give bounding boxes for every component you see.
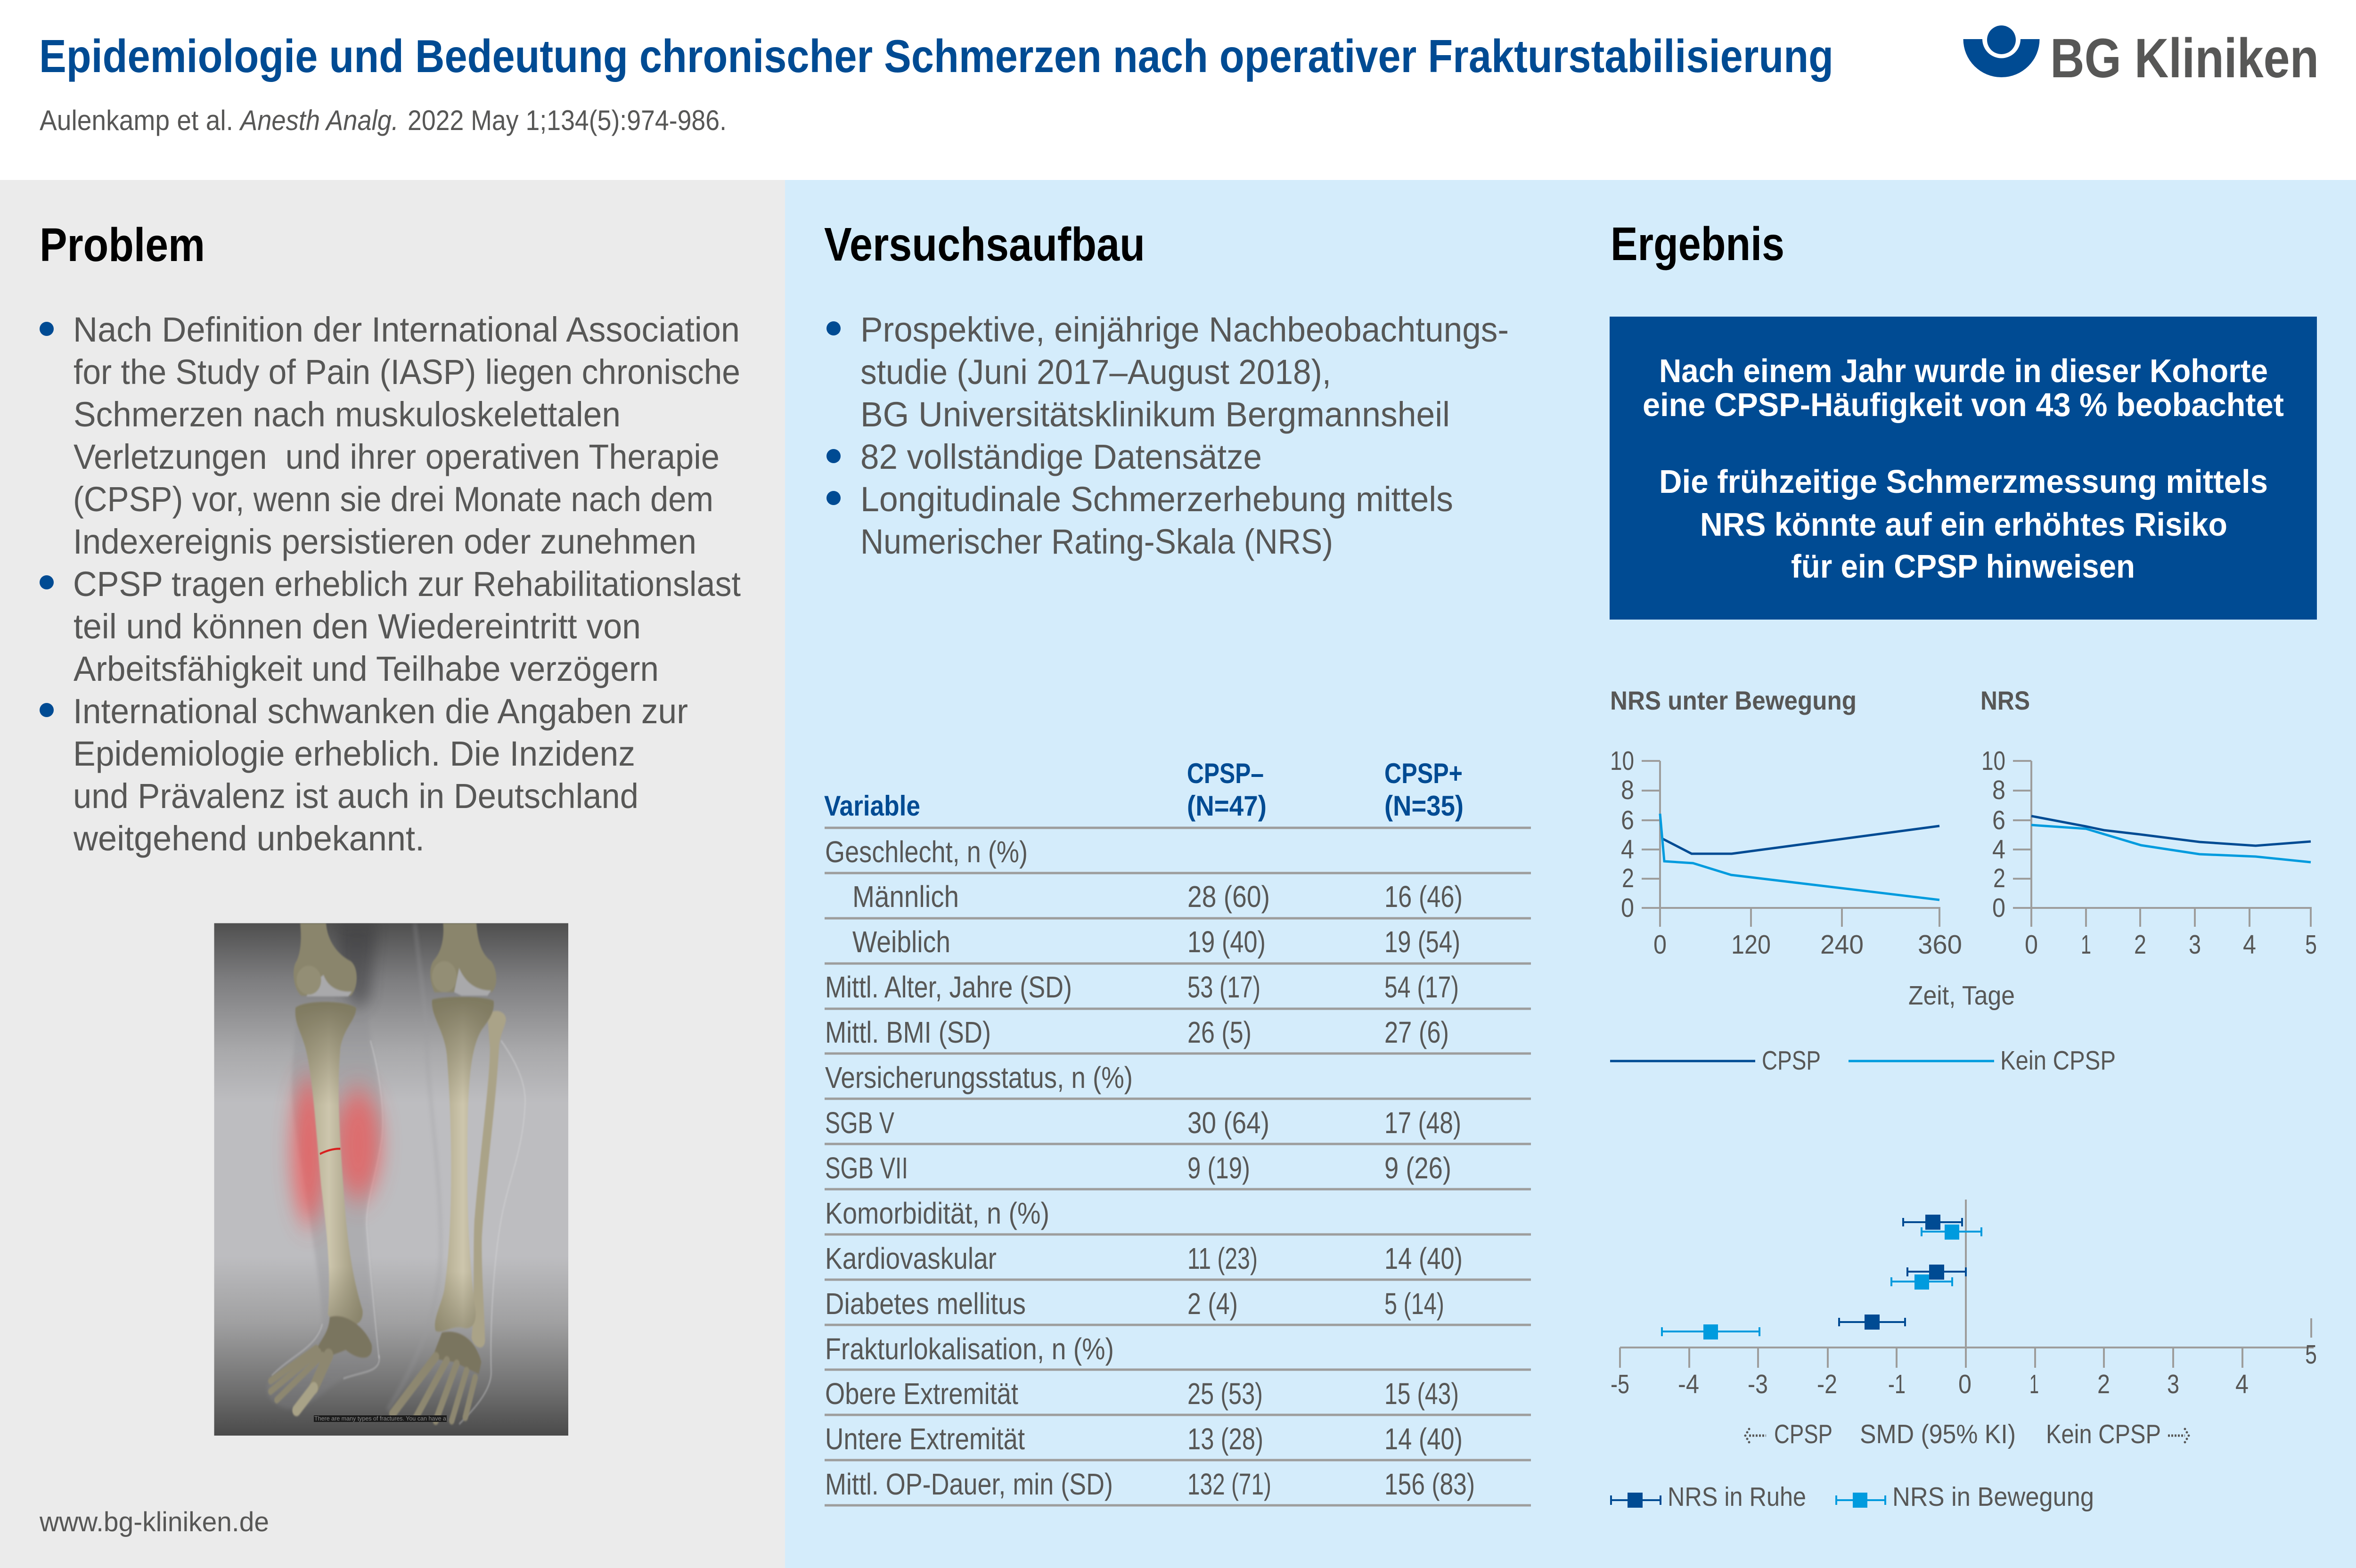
forest plot: SMD: -5	[1611, 1369, 1629, 1399]
line chart: NRS: 0	[1992, 893, 2005, 923]
table rows: 9 (26)	[1384, 1151, 1451, 1185]
series: CPSP	[2031, 816, 2311, 846]
forest plot: SMD: 3	[2167, 1369, 2179, 1399]
callout: key result: Nach einem Jahr wurde in dieser Kohorte	[1659, 352, 2268, 389]
text block: Versuchsaufbau bullets	[826, 310, 1509, 561]
text block: Versuchsaufbau bullets: Prospektive, einjährige Nachbeobachtungs-	[860, 310, 1509, 349]
forest plot: SMD: 1	[2029, 1369, 2039, 1399]
title: Epidemiologie und Bedeutung chronischer Schmerzen nach operativer Frakturstabilisierung	[39, 30, 1833, 82]
line chart: NRS unter Bewegung: 6	[1621, 805, 1634, 835]
text block: Versuchsaufbau bullets: studie (Juni 2017–August 2018),	[860, 352, 1331, 392]
text block: Problem bullets: CPSP tragen erheblich zur Rehabilitationslast	[73, 564, 741, 604]
forest plot: SMD: -3	[1748, 1369, 1768, 1399]
heading: Versuchsaufbau: Versuchsaufbau	[824, 218, 1145, 271]
line chart: NRS unter Bewegung: 0	[1621, 893, 1634, 923]
markers: NRS in Ruhe	[1839, 1215, 1966, 1330]
text block: Versuchsaufbau bullets: Numerischer Rating-Skala (NRS)	[860, 522, 1333, 561]
line chart: NRS: 10	[1981, 746, 2005, 776]
callout: key result: für ein CPSP hinweisen	[1791, 548, 2135, 585]
forest plot: SMD: 4	[2235, 1369, 2249, 1399]
table header: (N=47)	[1187, 790, 1267, 822]
text block: Problem bullets: teil und können den Wiedereintritt von	[74, 607, 641, 646]
line chart: NRS unter Bewegung: 8	[1621, 775, 1634, 805]
table rows	[825, 835, 1475, 1501]
forest plot axis caption: Kein CPSP	[2046, 1419, 2161, 1449]
text block: Problem bullets	[40, 310, 741, 858]
text block: Problem bullets: Epidemiologie erheblich. Die Inzidenz	[73, 734, 635, 773]
table rows: 28 (60)	[1187, 880, 1270, 914]
line chart: NRS unter Bewegung: 10	[1610, 746, 1634, 776]
forest plot axis caption: SMD (95% KI)	[1860, 1419, 2016, 1449]
table rows: Kardiovaskular	[825, 1241, 997, 1275]
heading: Ergebnis: Ergebnis	[1611, 218, 1784, 270]
line chart: NRS: 0	[2025, 930, 2038, 960]
table rows: 14 (40)	[1384, 1422, 1463, 1456]
line chart: NRS: 2	[2134, 930, 2146, 960]
table header: CPSP–	[1187, 758, 1264, 789]
line chart: NRS: 3	[2189, 930, 2201, 960]
text block: Problem bullets: (CPSP) vor, wenn sie drei Monate nach dem	[73, 480, 713, 519]
arrow: right dotted	[2168, 1428, 2190, 1444]
text block: Problem bullets: Nach Definition der International Association	[73, 310, 740, 349]
table rows: 11 (23)	[1187, 1241, 1258, 1275]
table rows: 27 (6)	[1384, 1015, 1449, 1049]
text block: Versuchsaufbau bullets: Longitudinale Schmerzerhebung mittels	[860, 480, 1453, 519]
table rows: 13 (28)	[1187, 1422, 1263, 1456]
table header: CPSP+	[1384, 758, 1463, 789]
markers: NRS in Bewegung	[1662, 1225, 1981, 1339]
table rows: Diabetes mellitus	[825, 1287, 1026, 1321]
table rows: 26 (5)	[1187, 1015, 1252, 1049]
text block: Problem bullets: International schwanken die Angaben zur	[73, 692, 688, 731]
table rows: 2 (4)	[1187, 1287, 1238, 1321]
table rows: 5 (14)	[1384, 1287, 1444, 1321]
line chart: NRS: 8	[1992, 775, 2005, 805]
table rows: 53 (17)	[1187, 970, 1260, 1004]
callout: key result: eine CPSP-Häufigkeit von 43 % beobachtet	[1643, 386, 2284, 423]
table rows: SGB V	[825, 1106, 894, 1140]
forest plot: SMD: -1	[1888, 1369, 1906, 1399]
table rows: Komorbidität, n (%)	[825, 1196, 1049, 1230]
table rows: Untere Extremität	[825, 1422, 1025, 1456]
line chart: NRS unter Bewegung: NRS unter Bewegung	[1610, 686, 1857, 715]
table rows: SGB VII	[825, 1151, 908, 1185]
line chart: NRS unter Bewegung: 4	[1621, 834, 1634, 865]
arrow: left dotted	[1744, 1428, 1766, 1444]
table rows: 17 (48)	[1384, 1106, 1461, 1140]
table header: (N=35)	[1384, 790, 1464, 822]
illustration: lower leg bones with fracture	[214, 923, 568, 1436]
image caption strip: There are many types of fractures. You can have a	[314, 1415, 447, 1422]
panel: Ergebnis	[1610, 218, 2317, 1512]
text block: Problem bullets: for the Study of Pain (IASP) liegen chronische	[74, 352, 740, 392]
website: www.bg-kliniken.de	[39, 1507, 269, 1537]
table rows: 19 (54)	[1384, 925, 1460, 959]
legend: line charts: CPSP	[1762, 1045, 1821, 1076]
text block: Problem bullets: Schmerzen nach muskuloskelettalen	[74, 395, 621, 434]
series: Kein CPSP	[1660, 814, 1939, 900]
legend: forest plot	[1611, 1482, 2094, 1512]
citation	[40, 105, 727, 136]
line chart: NRS	[1980, 686, 2317, 960]
table rows: 14 (40)	[1384, 1241, 1463, 1275]
table rows: 16 (46)	[1384, 880, 1463, 914]
line chart: NRS: 4	[1992, 834, 2005, 865]
table rows: 54 (17)	[1384, 970, 1459, 1004]
table rows: Versicherungsstatus, n (%)	[825, 1061, 1133, 1094]
text block: Problem bullets: Verletzungen und ihrer operativen Therapie	[74, 437, 720, 476]
table rows: Männlich	[852, 880, 959, 914]
forest plot: SMD: -2	[1817, 1369, 1837, 1399]
text block: Problem bullets: und Prävalenz ist auch in Deutschland	[73, 776, 638, 816]
series: CPSP	[1662, 826, 1939, 854]
header	[39, 25, 2319, 136]
line chart: NRS: 4	[2243, 930, 2256, 960]
forest plot axis caption	[1744, 1419, 2190, 1449]
table rows: Frakturlokalisation, n (%)	[825, 1332, 1114, 1366]
table header: Variable	[824, 790, 920, 822]
panel: Problem	[0, 180, 785, 1568]
text block: Versuchsaufbau bullets: 82 vollständige Datensätze	[860, 437, 1262, 476]
line chart: NRS unter Bewegung: 360	[1918, 930, 1962, 960]
table rows: Weiblich	[852, 925, 950, 959]
table rows: 30 (64)	[1187, 1106, 1269, 1140]
forest plot: SMD: -4	[1678, 1369, 1699, 1399]
table rows: 15 (43)	[1384, 1377, 1459, 1411]
line chart: NRS unter Bewegung: 0	[1653, 930, 1667, 960]
table rows: Mittl. Alter, Jahre (SD)	[825, 970, 1072, 1004]
panel: Versuchsaufbau	[785, 180, 2356, 1568]
line chart: NRS: 1	[2081, 930, 2091, 960]
table rows: 156 (83)	[1384, 1467, 1475, 1501]
table rows: 19 (40)	[1187, 925, 1266, 959]
table rows: Mittl. OP-Dauer, min (SD)	[825, 1467, 1113, 1501]
text block: Problem bullets: weitgehend unbekannt.	[73, 819, 425, 858]
citation: 2022 May 1;134(5):974-986.	[408, 105, 727, 136]
legend: forest plot: NRS in Bewegung	[1892, 1482, 2094, 1512]
forest plot: SMD: 0	[1958, 1369, 1972, 1399]
table: patient characteristics	[824, 758, 1531, 1505]
line chart: NRS unter Bewegung	[1610, 686, 1962, 960]
forest plot: SMD: 5	[2305, 1339, 2317, 1370]
line chart: NRS: NRS	[1980, 686, 2030, 715]
series: Kein CPSP	[2031, 825, 2311, 862]
line chart: NRS unter Bewegung: 240	[1820, 930, 1864, 960]
citation: Anesth Analg.	[239, 105, 399, 136]
table rows: Geschlecht, n (%)	[825, 835, 1028, 869]
line chart: NRS unter Bewegung: 120	[1731, 930, 1771, 960]
axis label: Zeit, Tage: Zeit, Tage	[1908, 980, 2015, 1011]
logo: BG Kliniken	[1963, 25, 2319, 90]
legend: line charts	[1610, 1045, 2116, 1076]
line chart: NRS: 6	[1992, 805, 2005, 835]
heading: Problem: Problem	[40, 219, 205, 271]
legend: line charts: Kein CPSP	[2000, 1045, 2116, 1076]
forest plot: SMD: 2	[2097, 1369, 2110, 1399]
callout: key result	[1610, 317, 2317, 620]
callout: key result: Die frühzeitige Schmerzmessung mittels	[1659, 463, 2268, 500]
table rows: 132 (71)	[1187, 1467, 1271, 1501]
table rows: Mittl. BMI (SD)	[825, 1015, 991, 1049]
logo: BG Kliniken: BG Kliniken	[2050, 27, 2319, 90]
table rows: 25 (53)	[1187, 1377, 1263, 1411]
citation: Aulenkamp et al.	[40, 105, 233, 136]
text block: Versuchsaufbau bullets: BG Universitätsklinikum Bergmannsheil	[860, 395, 1450, 434]
table header	[824, 758, 1464, 822]
forest plot axis caption: CPSP	[1774, 1419, 1832, 1449]
text block: Problem bullets: Indexereignis persistieren oder zunehmen	[73, 522, 696, 561]
line chart: NRS: 5	[2305, 930, 2317, 960]
callout: key result: NRS könnte auf ein erhöhtes Risiko	[1700, 506, 2227, 543]
line chart: NRS: 2	[1993, 863, 2005, 893]
table rows: 9 (19)	[1187, 1151, 1250, 1185]
line chart: NRS unter Bewegung: 2	[1622, 863, 1634, 893]
legend: forest plot: NRS in Ruhe	[1668, 1482, 1806, 1512]
table rows: Obere Extremität	[825, 1377, 1018, 1411]
forest plot: SMD	[1611, 1200, 2317, 1399]
text block: Problem bullets: Arbeitsfähigkeit und Teilhabe verzögern	[74, 649, 659, 688]
